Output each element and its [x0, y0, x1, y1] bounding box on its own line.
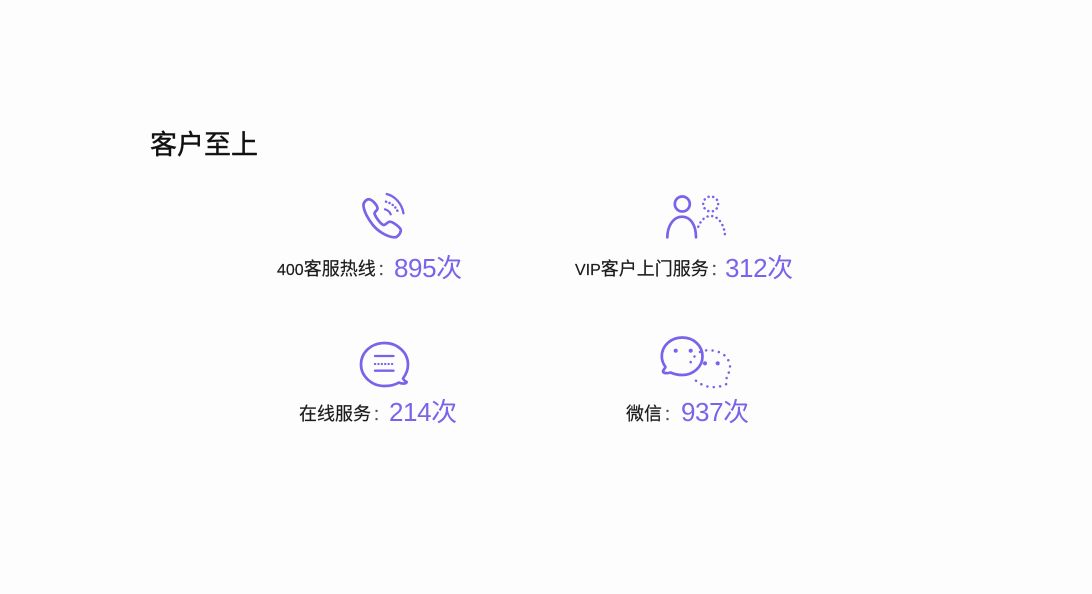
number: 214: 214次 — [389, 397, 457, 427]
label: 400 hotline: 400客服热线: — [277, 259, 384, 279]
number: 895: 895次 — [394, 253, 462, 283]
label: online service: 在线服务: — [299, 404, 379, 424]
title: 客户至上 — [150, 130, 258, 160]
number: 937: 937次 — [681, 397, 749, 427]
number: 312: 312次 — [725, 253, 793, 283]
label: VIP visits: VIP客户上门服务: — [575, 259, 717, 279]
label: WeChat: 微信: — [626, 404, 670, 424]
